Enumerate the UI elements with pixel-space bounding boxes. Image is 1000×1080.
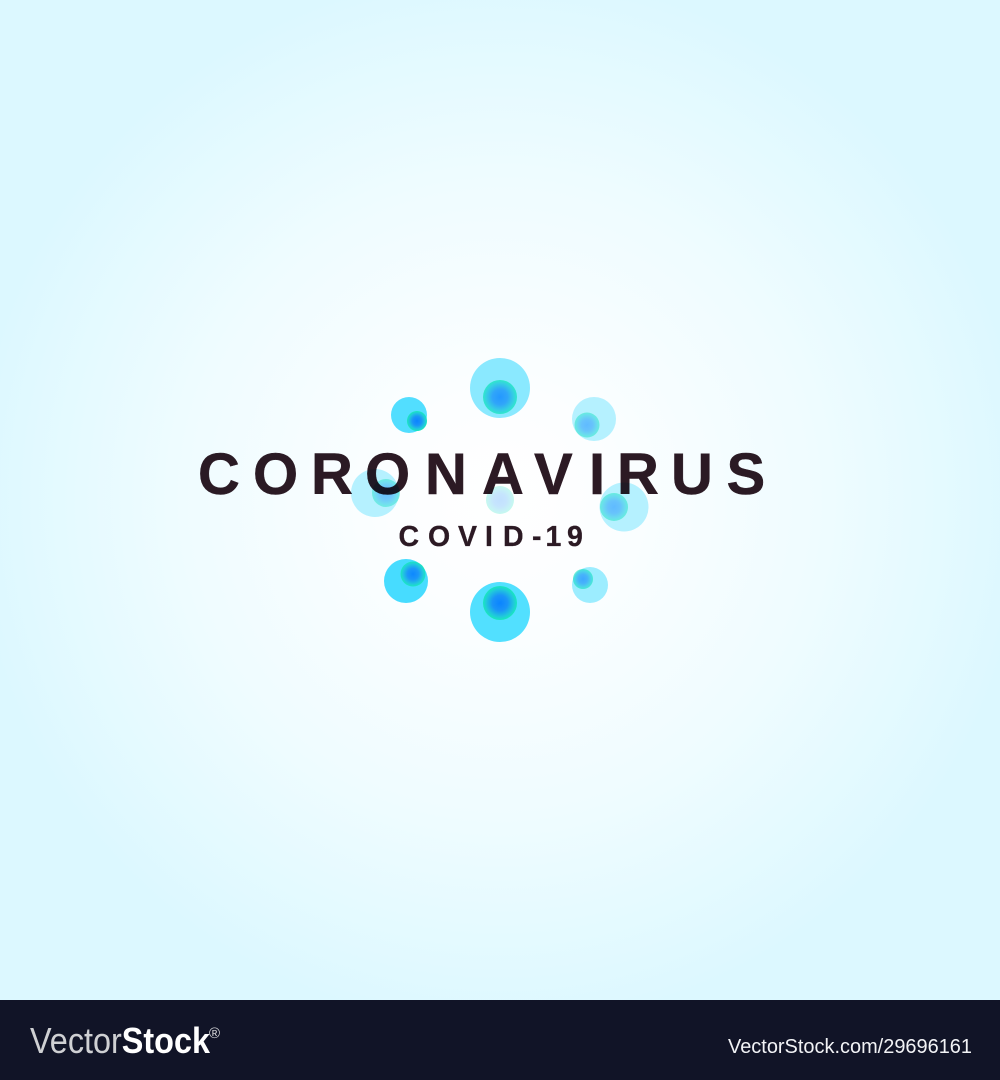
particle: right xyxy=(600,482,648,532)
particle: bottom xyxy=(470,582,530,642)
title: CORONAVIRUS xyxy=(198,442,765,507)
subtitle: COVID-19 xyxy=(398,521,583,553)
particle: bottom right xyxy=(572,567,608,603)
footer registered mark: ® xyxy=(209,1025,220,1042)
particle: left xyxy=(351,469,400,517)
footer bar xyxy=(0,1000,1000,1080)
particle: centre xyxy=(486,486,514,514)
footer logo: VectorStock xyxy=(30,1020,211,1061)
particle: bottom left xyxy=(384,559,428,603)
footer image id: VectorStock.com/29696161 xyxy=(728,1036,972,1058)
particle: top xyxy=(470,358,530,418)
particle: top right xyxy=(572,397,616,441)
virus logo mark xyxy=(351,358,648,642)
particle: top left xyxy=(391,397,427,433)
